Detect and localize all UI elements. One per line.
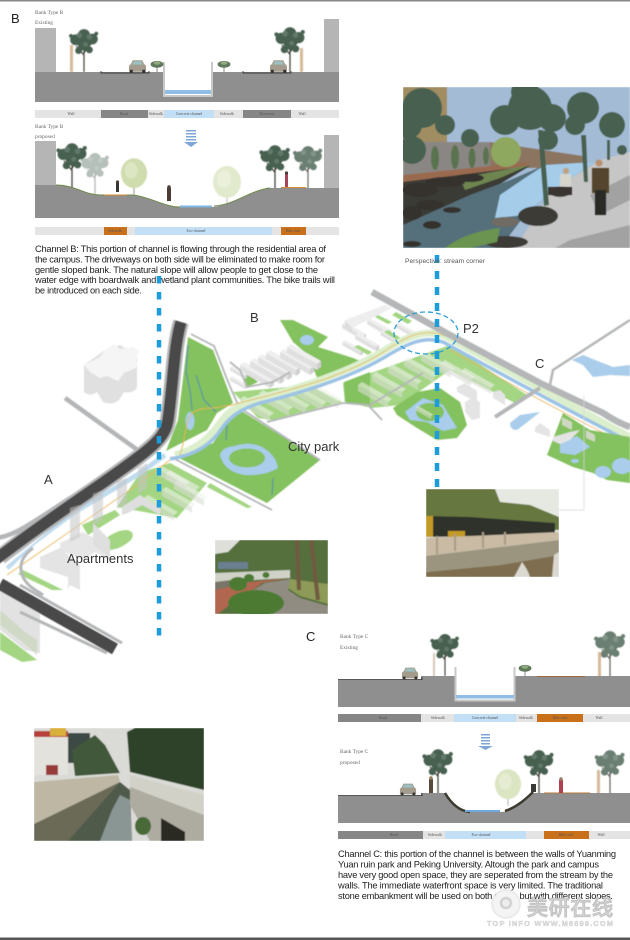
trees xyxy=(430,631,625,677)
section B existing legend bar: Road xyxy=(120,112,128,116)
photo: bus street and embankment xyxy=(426,489,559,577)
divider: dashed line A-B xyxy=(157,276,161,640)
people xyxy=(429,776,563,793)
map: lower campus green xyxy=(233,345,527,420)
map: campus pond xyxy=(300,335,314,345)
railing xyxy=(130,775,204,815)
heading: B: B xyxy=(11,11,20,26)
watermark text: 美研在线 xyxy=(527,896,613,920)
planted strip xyxy=(460,165,530,190)
callout: P2 dashed circle xyxy=(394,312,458,354)
watermark logo xyxy=(492,890,520,918)
railing xyxy=(215,570,290,582)
text: channel C description xyxy=(337,849,616,901)
caption: Bank Type B Existing: Bank Type B xyxy=(35,10,64,16)
map: park ring lake xyxy=(220,444,278,475)
tree canopy xyxy=(215,540,328,614)
panel: section B xyxy=(11,10,339,296)
caption: Bank Type B proposed: proposed xyxy=(35,134,55,140)
section B existing legend bar: Sidewalk xyxy=(149,112,163,116)
buildings xyxy=(35,135,339,188)
arrow: down xyxy=(184,130,198,147)
text: channel B description: be introduced on each side. xyxy=(35,286,142,296)
section B proposed legend bar: Bike curb xyxy=(286,229,301,233)
channel and road detail xyxy=(338,665,585,700)
map: green patch near road xyxy=(344,372,370,405)
caption: Bank Type B proposed xyxy=(35,124,64,140)
car xyxy=(400,784,416,795)
text: channel B description xyxy=(34,244,335,296)
text: channel B description: water edge with boardwalk and wetland plant communities. The bike trails will xyxy=(34,275,335,285)
section C existing drawing xyxy=(338,631,630,707)
section C proposed legend bar: Road xyxy=(390,833,398,837)
panel: section C xyxy=(306,629,630,901)
section C existing legend bar: Road xyxy=(379,716,387,720)
red sidewalk xyxy=(215,578,290,614)
section C proposed legend bar xyxy=(338,831,630,839)
road xyxy=(250,579,328,614)
right trees xyxy=(127,728,204,790)
map: side road and cross road xyxy=(0,398,139,538)
caption: Bank Type C Existing: Bank Type C xyxy=(340,634,369,640)
trees xyxy=(426,489,559,530)
grass xyxy=(288,579,328,604)
text: channel C description: Yuan ruin park and Peking University. Altough the park and campus xyxy=(338,860,599,870)
section B existing legend bar: Wall xyxy=(298,112,306,116)
section B proposed legend bar xyxy=(35,227,339,235)
water xyxy=(403,166,542,248)
map: city park south green xyxy=(177,410,320,503)
willow xyxy=(491,137,521,167)
map: north boundary road xyxy=(372,292,630,427)
red path xyxy=(403,162,528,183)
map: park streams xyxy=(186,345,273,495)
text: channel B description: Channel B: This portion of channel is flowing through the residential area of xyxy=(35,244,326,254)
photo: curved path xyxy=(215,540,328,616)
building xyxy=(403,87,447,147)
section C proposed legend bar: Wall xyxy=(597,833,605,837)
bush xyxy=(135,817,151,835)
railing posts xyxy=(437,532,505,554)
caption: Bank Type C proposed xyxy=(340,749,369,766)
caption: Bank Type C Existing xyxy=(340,634,369,651)
section C existing legend bar: Bike curb xyxy=(553,716,568,720)
pavement xyxy=(515,152,630,248)
map: eastern top pond xyxy=(572,355,630,377)
dark building xyxy=(66,733,90,763)
people xyxy=(116,171,288,201)
trees xyxy=(56,143,322,205)
cypress row xyxy=(431,145,489,170)
map: eastern park xyxy=(547,413,630,483)
caption: Bank Type C Existing: Existing xyxy=(340,645,358,651)
section C existing legend bar: Sidewalk xyxy=(431,716,445,720)
map: small pond xyxy=(186,412,194,430)
thin outline frame xyxy=(556,395,584,510)
ground section xyxy=(338,676,630,707)
tree shadows xyxy=(555,175,630,248)
rocks left xyxy=(402,174,484,247)
map: north road branch xyxy=(550,320,630,385)
map: upper campus green xyxy=(280,320,363,380)
section B proposed drawing xyxy=(35,124,339,218)
label: City park: City park xyxy=(288,439,340,454)
section C proposed legend bar: Eco-channel xyxy=(472,833,490,837)
tree trunks xyxy=(297,540,318,600)
top border xyxy=(0,0,630,2)
yellow bus sections xyxy=(426,516,465,537)
watermark xyxy=(487,890,613,928)
stone embankment and water xyxy=(338,792,590,812)
map: triangle green xyxy=(240,368,258,387)
sky xyxy=(446,87,630,248)
photo: canal xyxy=(34,728,204,841)
ground section xyxy=(35,185,339,218)
map: bridge road xyxy=(495,388,540,417)
yellow sign xyxy=(50,728,66,736)
text: channel B description: gentle sloped bank. The natural slope will allow people to get close to the xyxy=(35,265,318,275)
dark arch xyxy=(161,818,185,841)
section B existing legend bar: Concrete channel xyxy=(176,112,202,116)
caption: perspective stream corner: Perspective: stream corner xyxy=(405,258,486,265)
label: B: B xyxy=(250,310,259,325)
text: channel C description: walls. The immediate waterfront space is very limited. The traditional xyxy=(337,880,603,890)
label: A: A xyxy=(44,472,53,487)
planted slope and water xyxy=(56,185,306,207)
left walkway and bank xyxy=(34,775,120,824)
label: Apartments: Apartments xyxy=(67,551,134,566)
red shopfront xyxy=(46,765,58,775)
section C existing legend bar xyxy=(338,714,630,722)
concrete channel xyxy=(164,62,212,96)
section B proposed legend bar: Sidewalk xyxy=(108,229,122,233)
section B existing legend bar: Driveway xyxy=(260,112,275,116)
map: translucent campus rows xyxy=(240,352,495,422)
distant trees left xyxy=(72,735,120,776)
person seated xyxy=(548,168,572,195)
map: crossing columns xyxy=(70,463,147,542)
panel: channel map xyxy=(0,292,630,662)
arrow: down xyxy=(478,734,493,750)
water reflection xyxy=(100,795,132,841)
text: channel C description: stone embankment will be used on both sides, but with different slopes. xyxy=(338,891,613,901)
divider: dashed line B-C xyxy=(435,255,439,490)
map: stream corridor xyxy=(5,333,630,575)
trees xyxy=(69,27,305,72)
blue structure xyxy=(218,562,248,569)
caption: Bank Type B Existing xyxy=(35,10,64,26)
balusters xyxy=(514,552,559,577)
map: upper campus greens xyxy=(354,312,412,355)
caption: Bank Type C proposed: Bank Type C xyxy=(340,749,369,755)
bushes xyxy=(228,572,284,616)
label: P2: P2 xyxy=(463,321,479,336)
watermark url: TOP INFO WWW.M6699.COM xyxy=(487,919,613,928)
far walls xyxy=(490,142,583,168)
map: park road edges xyxy=(171,334,320,510)
caption: Bank Type B Existing: Existing xyxy=(35,20,53,26)
buildings xyxy=(35,19,339,72)
railing xyxy=(426,532,559,556)
map: apartment blocks xyxy=(0,465,208,655)
storefront xyxy=(34,731,68,775)
wall xyxy=(215,576,255,590)
ground section xyxy=(338,793,630,823)
section B existing drawing xyxy=(35,10,339,102)
photo: perspective stream corner xyxy=(394,78,630,248)
map: apartment green xyxy=(0,463,252,662)
caption: Bank Type C proposed: proposed xyxy=(340,760,360,766)
embankment wall xyxy=(426,540,559,572)
section B existing legend bar: Sidewalk xyxy=(220,112,234,116)
section B existing legend bar xyxy=(35,110,339,118)
section C proposed drawing xyxy=(338,749,630,823)
embankment base xyxy=(426,555,559,577)
left bank rocks zone xyxy=(403,166,530,226)
left lower bank xyxy=(34,782,120,841)
heading: C: C xyxy=(306,629,315,644)
section B existing legend bar: Wall xyxy=(67,112,75,116)
text: channel C description: Channel C: this portion of the channel is between the walls of Yuanming xyxy=(338,849,616,859)
map: eastern buildings xyxy=(535,417,595,444)
section C existing legend bar: Concrete channel xyxy=(472,716,498,720)
right wall xyxy=(130,785,204,841)
map: main highway xyxy=(0,322,181,653)
trees xyxy=(403,87,628,206)
red band xyxy=(34,731,68,737)
map: city park north green xyxy=(166,337,233,451)
section C existing legend bar: Sidewalk xyxy=(519,716,533,720)
sky xyxy=(426,489,559,538)
map: campus white blocks xyxy=(230,305,416,389)
map: eastern small pond xyxy=(510,412,540,430)
section C proposed legend bar: Sidewalk xyxy=(428,833,442,837)
person standing xyxy=(592,160,609,215)
buses xyxy=(426,516,555,537)
text: channel B description: the campus. The driveways on both side will be eliminated to make room for xyxy=(35,254,325,264)
rocks right xyxy=(484,187,570,248)
map: campus roads xyxy=(230,362,423,422)
caption: Bank Type B proposed: Bank Type B xyxy=(35,124,64,130)
map: flower-shaped tower xyxy=(84,344,139,404)
trees xyxy=(422,749,624,806)
label: C: C xyxy=(535,356,544,371)
map: east blocks xyxy=(457,383,505,420)
text: channel C description: have very good open space, they are seperated from the stream by the xyxy=(338,870,613,880)
reeds xyxy=(445,228,500,248)
cars and bushes xyxy=(101,60,291,73)
section C proposed legend bar: Bike curb xyxy=(559,833,574,837)
water xyxy=(68,782,132,841)
bottom border xyxy=(0,938,630,940)
section C existing legend bar: Wall xyxy=(595,716,603,720)
sky patch xyxy=(215,540,240,554)
map: island park xyxy=(393,388,467,440)
sky xyxy=(34,728,204,841)
ground section xyxy=(35,72,339,102)
section B proposed legend bar: Eco-channel xyxy=(187,229,205,233)
